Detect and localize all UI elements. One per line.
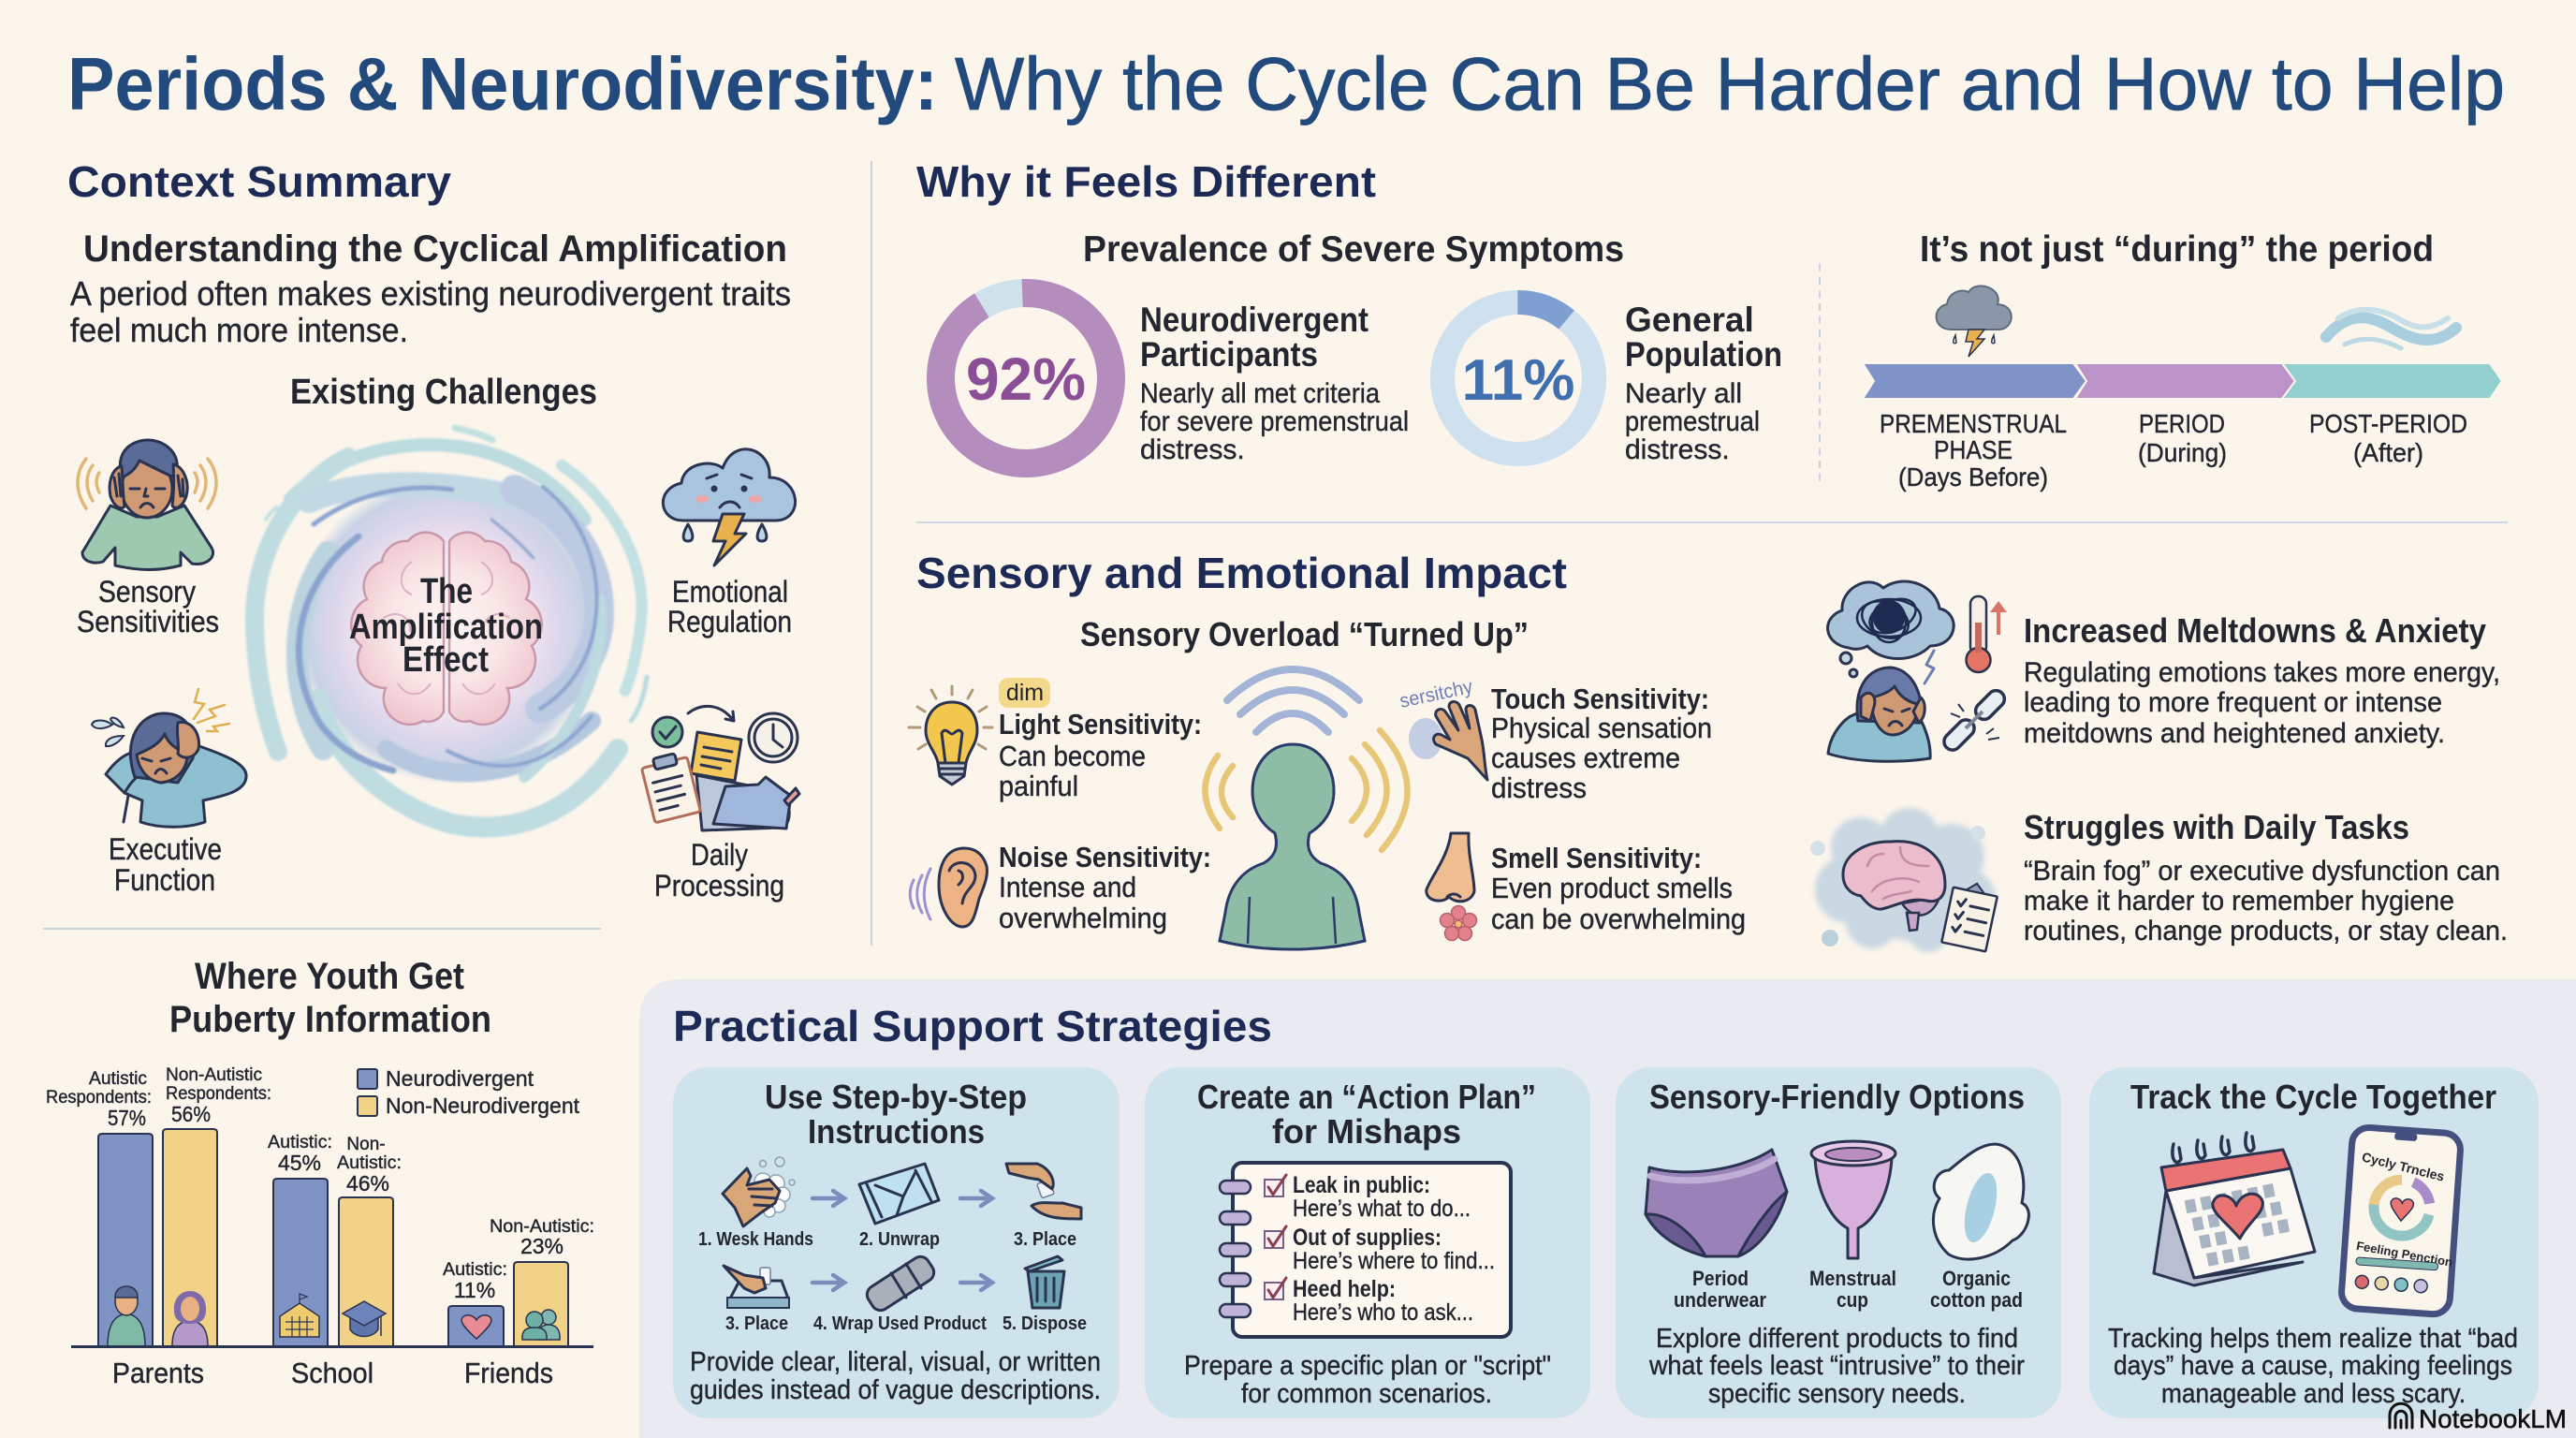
- text: daily tasks: make it harder to remember hygiene: [2024, 886, 2454, 917]
- label: sensory sensitivities: Sensitivities: [77, 605, 219, 638]
- icon: daily processing items: [640, 706, 799, 830]
- card title: Instructions: [808, 1112, 985, 1151]
- card title: [1197, 1078, 1536, 1151]
- block: meltdowns and anxiety: [1828, 581, 2500, 761]
- card: action plan: [1145, 1067, 1590, 1418]
- card title: Sensory-Friendly Options: [1649, 1078, 2025, 1116]
- text: intro: feel much more intense.: [70, 311, 408, 349]
- text: smell sensitivity: Smell Sensitivity:: [1491, 842, 1702, 874]
- text: smell sensitivity: can be overwhelming: [1491, 902, 1746, 935]
- text: amplification effect: The: [420, 572, 473, 611]
- card title: Track the Cycle Together: [2130, 1078, 2496, 1116]
- icon: central figure with waves: [1205, 669, 1408, 949]
- text: amplification effect: Amplification: [349, 608, 543, 647]
- notebook checklist: Heed help:: [1293, 1276, 1396, 1302]
- icon: period underwear: [1646, 1150, 1787, 1256]
- labels: steps row two: 5. Dispose: [1003, 1313, 1087, 1334]
- notebook checklist: Here’s who to ask...: [1293, 1299, 1473, 1326]
- labels: categories: Friends: [464, 1357, 553, 1389]
- subheading: cyclical amplification: Understanding the Cyclical Amplification: [83, 228, 787, 270]
- text: light sensitivity: [999, 708, 1202, 802]
- label: emotional regulation: Emotional: [672, 575, 788, 609]
- label: daily processing: [654, 838, 784, 902]
- icon: emotional regulation cloud: [663, 449, 796, 565]
- labels: categories: Parents: [112, 1357, 204, 1389]
- labels: premenstrual phase: PREMENSTRUAL: [1880, 409, 2067, 438]
- icon: trash can: [1025, 1256, 1064, 1308]
- title: Periods & Neurodiversity:: [67, 42, 938, 125]
- card text: guides instead of vague descriptions.: [690, 1375, 1101, 1405]
- donut chart: 11 percent: [1442, 302, 1594, 454]
- card text: specific sensory needs.: [1708, 1379, 1966, 1409]
- labels: post-period: (After): [2353, 438, 2423, 467]
- text: neurodivergent participants: Neurodivergent: [1140, 301, 1368, 339]
- text: smell sensitivity: Even product smells: [1491, 872, 1733, 904]
- text: neurodivergent participants: Nearly all met criteria: [1140, 378, 1380, 409]
- legend: Non-Neurodivergent: [386, 1093, 580, 1118]
- text: general population: premestrual: [1625, 406, 1760, 437]
- arrow: [812, 1275, 844, 1290]
- text: neurodivergent participants: [1140, 301, 1409, 465]
- icon: hand: sersitchy: [1398, 676, 1475, 712]
- subheading: existing challenges: Existing Challenges: [290, 373, 597, 412]
- icon: tracking phone: Feeling Penction: [2355, 1239, 2453, 1269]
- text: neurodivergent participants: for severe premenstrual: [1140, 406, 1409, 437]
- labels: products: Menstrual: [1809, 1267, 1896, 1290]
- text: neurodivergent participants: Participants: [1140, 335, 1318, 374]
- block: light sensitivity: [909, 678, 1202, 802]
- card text: [2108, 1324, 2518, 1409]
- labels: steps row two: 3. Place: [725, 1313, 788, 1334]
- subheading: not just during: It’s not just “during” the period: [1920, 229, 2434, 270]
- heading: why it feels different: Why it Feels Different: [916, 157, 1376, 206]
- labels: premenstrual phase: PHASE: [1934, 435, 2012, 464]
- subheading: sensory overload: Sensory Overload “Turned Up”: [1080, 615, 1529, 653]
- text: meltdowns and anxiety: meitdowns and heightened anxiety.: [2024, 718, 2445, 749]
- icon: calendar: [2154, 1133, 2315, 1285]
- panel: practical support strategies: [639, 979, 2576, 1438]
- icon: menstrual cup: [1811, 1141, 1895, 1258]
- label: executive function: [109, 832, 222, 897]
- block: touch sensitivity: [1398, 676, 1712, 804]
- labels: products: Organic: [1942, 1267, 2011, 1290]
- text: intro: [70, 274, 791, 349]
- labels: school percentages: [268, 1133, 402, 1196]
- labels: categories: [112, 1357, 553, 1389]
- labels: parents percentages: Respondents:: [166, 1084, 271, 1104]
- donut chart: 11 percent: 11%: [1462, 348, 1574, 413]
- notebook checklist: Leak in public:: [1293, 1172, 1430, 1198]
- heading: where youth get puberty information: Where Youth Get: [195, 956, 464, 997]
- watermark: NotebookLM: NotebookLM: [2419, 1404, 2567, 1433]
- bars: friends: [448, 1262, 568, 1346]
- labels: products: cup: [1837, 1288, 1868, 1312]
- labels: school percentages: Autistic:: [268, 1133, 332, 1152]
- labels: products: cotton pad: [1930, 1288, 2023, 1312]
- labels: school percentages: 46%: [346, 1171, 389, 1196]
- card title: [765, 1078, 1027, 1151]
- card: track the cycle together: [2089, 1067, 2539, 1418]
- timeline chevrons: [1863, 363, 2502, 399]
- icon: broken chain: [1940, 687, 2008, 754]
- labels: friends percentages: 11%: [454, 1278, 495, 1302]
- card text: what feels least “intrusive” to their: [1648, 1351, 2025, 1381]
- text: meltdowns and anxiety: [2024, 611, 2500, 749]
- text: intro: A period often makes existing neurodivergent traits: [70, 274, 791, 313]
- text: general population: Population: [1625, 335, 1782, 374]
- arrow: [960, 1275, 992, 1290]
- card text: [690, 1347, 1101, 1405]
- labels: products: Period: [1692, 1267, 1749, 1290]
- text: daily tasks: [2024, 808, 2508, 946]
- block: smell sensitivity: [1427, 833, 1746, 940]
- icon: hand: [1398, 676, 1487, 780]
- legend: Neurodivergent: [386, 1066, 534, 1091]
- text: meltdowns and anxiety: Regulating emotions takes more energy,: [2024, 657, 2500, 688]
- text: touch sensitivity: [1491, 682, 1712, 804]
- bars: parents: [98, 1129, 217, 1346]
- icon: sensory sensitivities person: [78, 440, 216, 569]
- icon: parent figures: [108, 1286, 208, 1346]
- icon: washing hands: [723, 1157, 795, 1226]
- tag: dim: dim: [1006, 680, 1044, 706]
- arrow: [812, 1191, 844, 1206]
- labels: friends percentages: Non-Autistic:: [490, 1217, 594, 1237]
- labels: parents percentages: Autistic: [89, 1069, 147, 1089]
- icon: overwhelmed person: [1828, 581, 1954, 761]
- notebook checklist: [1220, 1163, 1511, 1337]
- text: light sensitivity: Can become: [999, 740, 1146, 772]
- text: meltdowns and anxiety: Increased Meltdowns & Anxiety: [2024, 611, 2486, 650]
- icon: tracking phone: [2340, 1126, 2462, 1315]
- labels: steps row one: [698, 1229, 1076, 1250]
- card text: for common scenarios.: [1241, 1379, 1492, 1409]
- icon: executive function person: [92, 689, 246, 827]
- text: touch sensitivity: distress: [1491, 771, 1587, 804]
- panel: why it feels different: [916, 157, 2502, 492]
- icon: brain: [351, 533, 542, 725]
- icon: ear: [910, 848, 988, 927]
- text: smell sensitivity: [1491, 842, 1746, 935]
- labels: post-period: POST-PERIOD: [2309, 409, 2467, 438]
- arrow: [960, 1191, 992, 1206]
- labels: products: [1674, 1267, 2023, 1312]
- card text: Tracking helps them realize that “bad: [2108, 1324, 2518, 1354]
- card text: [1648, 1324, 2025, 1409]
- labels: period: (During): [2138, 438, 2227, 467]
- title: Why the Cycle Can Be Harder and How to Help: [955, 42, 2505, 125]
- icon: heart and friends: [461, 1310, 560, 1340]
- text: general population: General: [1625, 301, 1754, 339]
- text: touch sensitivity: Touch Sensitivity:: [1491, 682, 1709, 715]
- labels: parents percentages: [46, 1065, 271, 1130]
- text: general population: distress.: [1625, 434, 1730, 465]
- text: noise sensitivity: Intense and: [999, 871, 1136, 903]
- labels: parents percentages: Respondents:: [46, 1088, 152, 1108]
- donut chart: 92 percent: 92%: [966, 345, 1086, 413]
- heading: practical support strategies: Practical Support Strategies: [673, 1002, 1272, 1050]
- block: daily tasks: [1810, 808, 2508, 952]
- bar chart: [46, 1065, 594, 1389]
- icon: school building and cap: [280, 1294, 386, 1337]
- heading: where youth get puberty information: Puberty Information: [169, 999, 491, 1040]
- label: sensory sensitivities: [77, 575, 219, 638]
- heading: sensory and emotional impact: Sensory and Emotional Impact: [916, 549, 1567, 597]
- panel: context summary: [67, 157, 799, 902]
- card title: Create an “Action Plan”: [1197, 1078, 1536, 1116]
- labels: post-period: [2309, 409, 2467, 467]
- text: light sensitivity: Light Sensitivity:: [999, 708, 1202, 741]
- labels: premenstrual phase: (Days Before): [1898, 462, 2048, 492]
- text: touch sensitivity: Physical sensation: [1491, 712, 1712, 744]
- tag: dim: [999, 678, 1050, 708]
- icon: storm cloud: [1937, 286, 2012, 357]
- labels: categories: School: [291, 1357, 373, 1389]
- card text: Provide clear, literal, visual, or written: [690, 1347, 1101, 1377]
- text: daily tasks: “Brain fog” or executive dysfunction can: [2024, 856, 2500, 887]
- labels: school percentages: Autistic:: [337, 1153, 402, 1173]
- labels: steps row one: 3. Place: [1014, 1229, 1076, 1250]
- icon: waves: [2326, 310, 2456, 348]
- donut chart: 92 percent: [938, 290, 1114, 466]
- notebook checklist: Here’s what to do...: [1293, 1196, 1471, 1222]
- card title: for Mishaps: [1272, 1112, 1461, 1151]
- icon: foggy brain: [1810, 808, 1999, 952]
- labels: period: PERIOD: [2139, 409, 2225, 438]
- label: sensory sensitivities: Sensory: [98, 575, 196, 609]
- text: meltdowns and anxiety: leading to more frequent or intense: [2024, 687, 2442, 718]
- icon: nose and flower: [1427, 833, 1477, 940]
- labels: school percentages: Non-: [346, 1135, 386, 1154]
- labels: friends percentages: [443, 1217, 594, 1302]
- heading: where youth get puberty information: [169, 956, 491, 1040]
- label: daily processing: Daily: [691, 838, 748, 872]
- card text: Prepare a specific plan or "script": [1184, 1351, 1551, 1381]
- icon: wrapped pad: [859, 1164, 939, 1224]
- panel: puberty information chart: [46, 956, 594, 1389]
- text: general population: Nearly all: [1625, 378, 1742, 409]
- icon: sink: [724, 1266, 789, 1308]
- labels: steps row one: 2. Unwrap: [859, 1229, 940, 1250]
- text: noise sensitivity: [999, 841, 1211, 934]
- icon: light bulb: [909, 686, 992, 785]
- bars: school: [273, 1179, 393, 1346]
- labels: steps row two: 4. Wrap Used Product: [813, 1313, 987, 1334]
- text: daily tasks: routines, change products, or stay clean.: [2024, 916, 2508, 946]
- text: amplification effect: [349, 572, 543, 680]
- panel: sensory and emotional impact: [909, 549, 2508, 952]
- icon: thermometer: [1966, 596, 2007, 672]
- labels: period: [2138, 409, 2227, 467]
- labels: premenstrual phase: [1880, 409, 2067, 492]
- icon: amplification swirl: [255, 428, 647, 827]
- labels: school percentages: 45%: [278, 1151, 321, 1175]
- labels: friends percentages: Autistic:: [443, 1260, 507, 1280]
- card text: [1184, 1351, 1551, 1409]
- icon: wrapped product: [864, 1254, 937, 1313]
- text: noise sensitivity: overwhelming: [999, 902, 1167, 934]
- label: emotional regulation: [667, 575, 792, 638]
- block: noise sensitivity: [910, 841, 1211, 934]
- text: amplification effect: Effect: [402, 640, 489, 680]
- text: general population: [1625, 301, 1782, 465]
- text: touch sensitivity: causes extreme: [1491, 741, 1680, 774]
- labels: steps row one: 1. Wesk Hands: [698, 1229, 813, 1250]
- labels: steps row two: [725, 1313, 1087, 1334]
- notebook checklist: Here’s where to find...: [1293, 1248, 1495, 1274]
- icon: cotton pad: [1933, 1144, 2028, 1259]
- card: sensory-friendly options: [1616, 1067, 2061, 1418]
- labels: parents percentages: 57%: [108, 1106, 146, 1130]
- title: [67, 42, 2505, 125]
- card text: manageable and less scary.: [2161, 1379, 2466, 1409]
- text: neurodivergent participants: distress.: [1140, 434, 1245, 465]
- labels: parents percentages: Non-Autistic: [166, 1065, 262, 1085]
- label: daily processing: Processing: [654, 869, 784, 902]
- card title: Use Step-by-Step: [765, 1078, 1027, 1116]
- label: executive function: Executive: [109, 832, 222, 866]
- text: noise sensitivity: Noise Sensitivity:: [999, 841, 1211, 873]
- card text: days” have a cause, making feelings: [2114, 1351, 2512, 1381]
- subheading: prevalence: Prevalence of Severe Symptoms: [1083, 229, 1624, 270]
- icon: placing pad: [1006, 1164, 1081, 1219]
- card text: Explore different products to find: [1656, 1324, 2018, 1354]
- label: emotional regulation: Regulation: [667, 605, 792, 638]
- text: light sensitivity: painful: [999, 770, 1078, 802]
- labels: parents percentages: 56%: [171, 1102, 211, 1126]
- labels: friends percentages: 23%: [520, 1234, 564, 1258]
- label: executive function: Function: [114, 863, 215, 897]
- labels: products: underwear: [1674, 1288, 1766, 1312]
- heading: context summary: Context Summary: [67, 157, 451, 206]
- card: step-by-step instructions: [673, 1067, 1120, 1418]
- text: daily tasks: Struggles with Daily Tasks: [2024, 808, 2409, 846]
- notebook checklist: Out of supplies:: [1293, 1225, 1442, 1251]
- icon: tracking phone: Cycly Trncles: [2361, 1149, 2446, 1184]
- legend: [358, 1066, 580, 1118]
